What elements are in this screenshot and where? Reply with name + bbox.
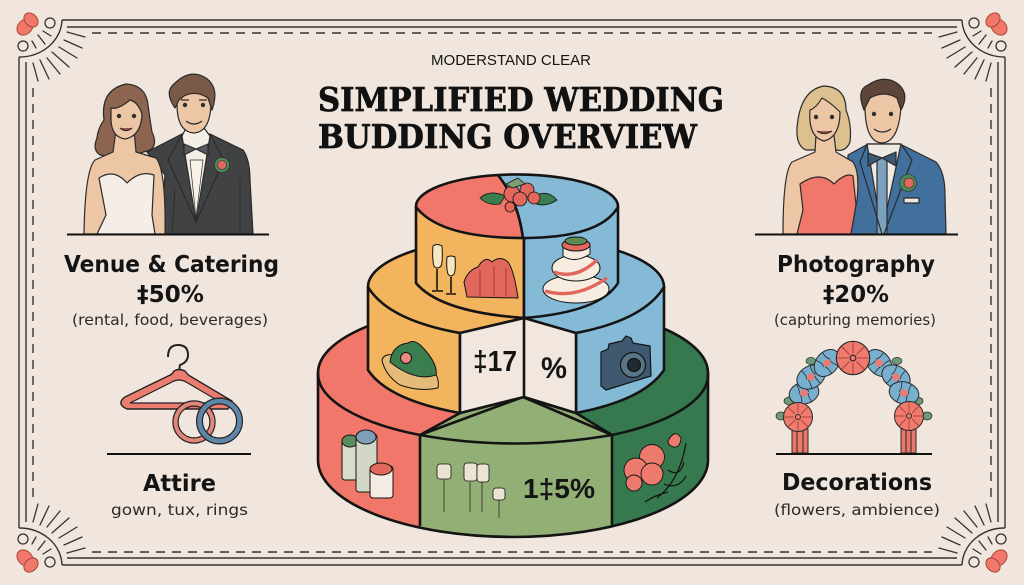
text: decorations: Decorations (782, 470, 932, 496)
head and hair (865, 92, 901, 143)
text: venue and catering (64, 252, 279, 329)
bride hair (95, 84, 155, 158)
blue suit (847, 144, 946, 234)
white gown (97, 174, 155, 234)
baseline: left couple (67, 234, 269, 236)
top tier (416, 174, 618, 318)
text: decorations (774, 470, 940, 519)
text: venue and catering: Venue & Catering (64, 252, 279, 278)
icon: camera (601, 336, 651, 390)
label: 17: ‡17 (473, 346, 517, 378)
baseline: right couple (755, 234, 958, 236)
text: attire: Attire (143, 471, 216, 497)
illustration: bridesmaid and groom in blue suit (783, 79, 946, 234)
skin (783, 135, 858, 234)
text: photography (774, 252, 936, 329)
text: decorations: (flowers, ambience) (774, 501, 940, 519)
blond hair (797, 86, 850, 150)
label: 15 percent: 1‡5% (523, 473, 595, 504)
text: photography: (capturing memories) (774, 311, 936, 329)
title (318, 80, 724, 156)
text: venue and catering: ‡50% (137, 282, 204, 308)
icon: jars (342, 430, 393, 498)
groom black suit (147, 134, 253, 234)
text: photography: ‡20% (823, 282, 889, 308)
icon: plated dish (382, 342, 438, 389)
bottom tier (318, 303, 708, 537)
boutonniere (214, 158, 230, 172)
groom head and hair (177, 92, 211, 133)
bride skin (84, 130, 165, 234)
title: SIMPLIFIED WEDDING (318, 80, 724, 119)
icon: glasses and candles (437, 463, 505, 518)
divider: decorations (776, 453, 932, 455)
illustration: bride and groom in black tux (84, 74, 253, 234)
icon: rose (624, 434, 686, 502)
divider: attire (107, 453, 251, 455)
text: photography: Photography (777, 252, 935, 278)
icon: floral arch (776, 341, 932, 453)
icon: top floral (480, 178, 557, 212)
text: attire: gown, tux, rings (111, 501, 248, 519)
icon: tiered cake (543, 237, 609, 303)
icon: champagne and gown (432, 244, 518, 298)
text: attire (111, 471, 248, 519)
chart: tiered budget cake (318, 174, 708, 537)
title: BUDDING OVERVIEW (318, 117, 698, 156)
subtitle: MODERSTAND CLEAR (431, 52, 591, 69)
icon: hanger and rings (121, 345, 240, 441)
boutonniere (900, 174, 916, 192)
text: venue and catering: (rental, food, beverages) (72, 311, 268, 329)
label: percent: % (541, 352, 567, 385)
coral dress (797, 175, 856, 234)
middle tier (368, 237, 664, 413)
